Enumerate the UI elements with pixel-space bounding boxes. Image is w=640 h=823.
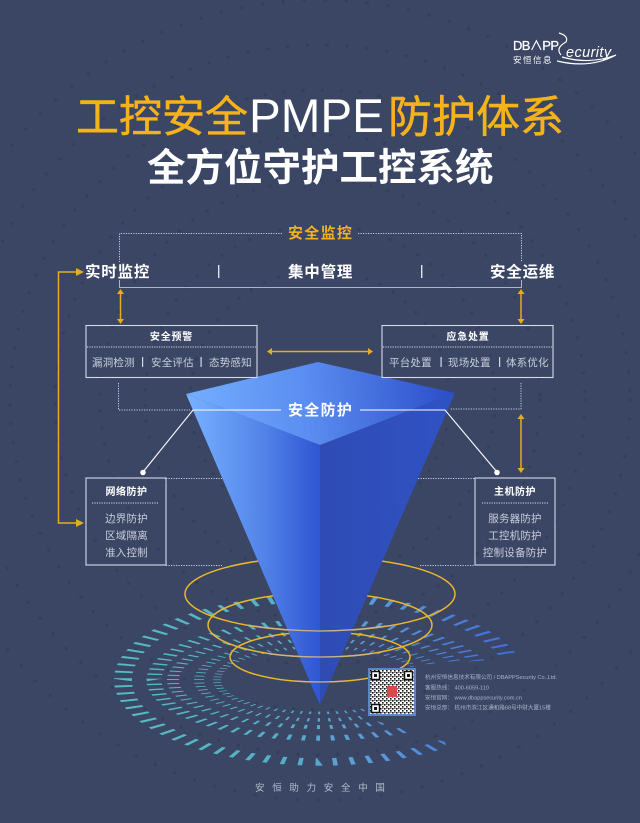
subtitle: 全方位守护工控系统 — [147, 147, 494, 190]
panel: early warning: 安全评估 — [151, 356, 194, 369]
logo: DB∧PP — [513, 38, 558, 53]
panel: network protection: 区域隔离 — [105, 529, 148, 542]
callout lines — [141, 410, 499, 475]
panel: early warning: 态势感知 — [209, 356, 252, 369]
panel: network protection: 网络防护 — [106, 485, 148, 498]
monitoring frame — [120, 234, 522, 288]
title: 防护体系 — [388, 93, 564, 142]
gold orbit rings, front — [254, 626, 386, 682]
company contact details: 安恒官网： www.dbappsecurity.com.cn — [425, 694, 522, 702]
panel: emergency response: 应急处置 — [446, 330, 490, 343]
radial dash rings — [123, 598, 517, 762]
logo: ecurity — [566, 45, 612, 61]
panel: host protection: 控制设备防护 — [483, 546, 547, 559]
panel: host protection: 服务器防护 — [488, 512, 542, 525]
protection frame — [118, 383, 521, 566]
heading: security protection: 安全防护 — [288, 401, 353, 419]
QR code — [368, 668, 416, 716]
panel: host protection: 主机防护 — [494, 485, 536, 498]
double arrows — [117, 289, 524, 473]
panel: host protection: 工控机防护 — [488, 529, 542, 542]
company contact details — [425, 673, 558, 712]
title: 工控安全 — [76, 94, 248, 142]
panel: network protection: 准入控制 — [105, 546, 148, 559]
feedback arrow — [58, 268, 84, 527]
company contact details: 客服热线： 400-6059-110 — [425, 684, 489, 692]
panel: emergency response — [382, 326, 553, 378]
panel: network protection — [86, 478, 166, 565]
panel: early warning — [86, 326, 257, 378]
panel: emergency response: 现场处置 — [448, 356, 491, 369]
inverted pyramid — [186, 362, 455, 705]
monitoring row: 实时监控 — [85, 262, 150, 281]
company contact details: 安恒总部： 杭州市滨江区通和路68号中财大厦15楼 — [425, 704, 551, 712]
gold orbit rings, back — [185, 557, 455, 682]
logo: 安恒信息 — [513, 55, 553, 65]
monitoring row — [85, 262, 555, 281]
logo — [513, 33, 616, 65]
monitoring row: 集中管理 — [288, 262, 353, 281]
monitoring row: 安全运维 — [490, 262, 555, 281]
company contact details: 杭州安恒信息技术有限公司 / DBAPPSecurity Co.,Ltd. — [425, 673, 558, 681]
panel: host protection — [475, 478, 555, 565]
title: PMPE — [249, 90, 384, 143]
panel: early warning: 漏洞检测 — [92, 356, 135, 369]
panel: emergency response: 体系优化 — [506, 356, 549, 369]
footer slogan: 安恒助力安全中国 — [255, 782, 393, 794]
panel: early warning: 安全预警 — [150, 330, 193, 343]
panel: emergency response: 平台处置 — [389, 356, 432, 369]
panel: network protection: 边界防护 — [105, 512, 148, 525]
heading: security monitoring: 安全监控 — [288, 224, 353, 242]
